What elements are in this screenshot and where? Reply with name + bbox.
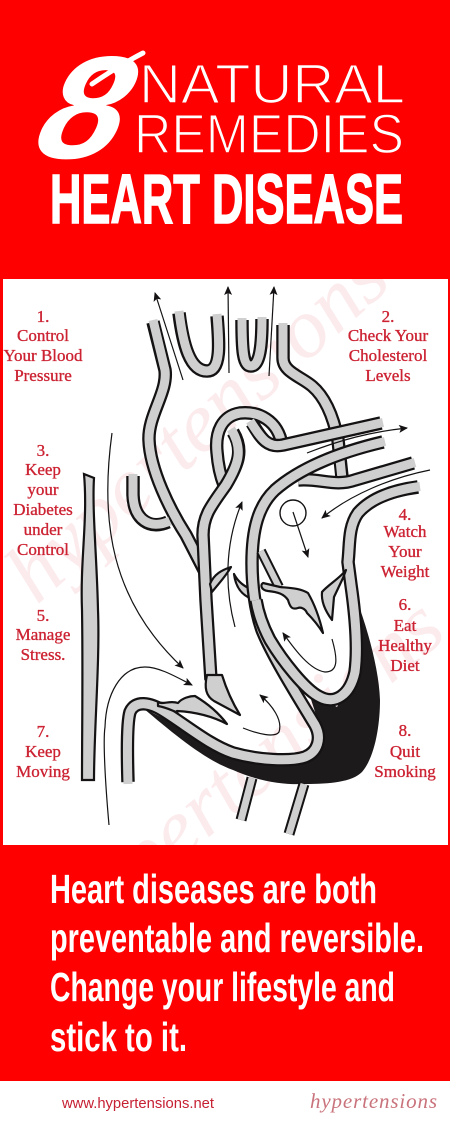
label 1: Your Blood bbox=[3, 346, 83, 365]
valve: mitral leaflet bbox=[261, 583, 323, 633]
vessel: aorta and right ventricle wall bbox=[127, 442, 385, 784]
label 2: Levels bbox=[365, 366, 411, 385]
valve: central bulb bbox=[206, 675, 240, 715]
vessel: left ventricle wall bbox=[256, 486, 420, 700]
label 8: 8. bbox=[399, 721, 411, 740]
arrow: right pulmonary bbox=[307, 428, 407, 453]
vessel: right upper branch bbox=[283, 323, 342, 479]
label 4: Weight bbox=[381, 562, 430, 581]
vessel: left U loop bbox=[133, 474, 170, 525]
label 6: Healthy bbox=[378, 636, 432, 655]
label 3: 3. bbox=[37, 441, 49, 460]
arrow: up right bbox=[269, 287, 274, 376]
label 7: 7. bbox=[37, 722, 49, 741]
labels bbox=[3, 307, 436, 781]
label 6: Eat bbox=[394, 616, 417, 635]
label 5: 5. bbox=[37, 606, 49, 625]
arrow: up center bbox=[228, 287, 229, 373]
label 3: under bbox=[24, 520, 63, 539]
arrow: central upward bbox=[228, 502, 242, 627]
label 6: Diet bbox=[390, 656, 420, 675]
heart muscle wall bbox=[143, 598, 380, 784]
label 6: 6. bbox=[399, 595, 411, 614]
panel: heart diagram background bbox=[3, 279, 448, 845]
label 3: your bbox=[27, 480, 59, 499]
panel: bottom red message bbox=[0, 845, 450, 1081]
circle valve icon bbox=[280, 500, 306, 526]
label 7: Moving bbox=[16, 762, 70, 781]
message text bbox=[50, 866, 424, 1060]
watermark bbox=[4, 279, 442, 845]
title line: natural: NATURAL bbox=[139, 52, 405, 115]
heart diagram bbox=[82, 287, 430, 834]
arrow: into left atrium bbox=[322, 470, 430, 518]
title bbox=[10, 27, 405, 238]
valve: tricuspid leaflet bbox=[158, 696, 227, 724]
label 8: Smoking bbox=[374, 762, 436, 781]
vessel: left upper branch bbox=[149, 320, 204, 570]
valve: small flap right bbox=[234, 574, 252, 599]
label 5: Manage bbox=[16, 625, 70, 644]
vessel: lower pulmonary vein bbox=[298, 462, 415, 483]
valve: mitral branch bbox=[261, 551, 279, 587]
label 3: Control bbox=[17, 540, 69, 559]
watermark: hypertensions bbox=[34, 579, 450, 959]
vessel: central descending bbox=[203, 429, 239, 680]
vessel: pulmonary trunk bbox=[250, 421, 383, 446]
arrows bbox=[104, 287, 430, 825]
label 1: Control bbox=[17, 326, 69, 345]
vessel: first U arch bbox=[179, 311, 219, 371]
label 3: Keep bbox=[25, 460, 61, 479]
vessel: second U arch bbox=[242, 317, 262, 366]
label 4: 4. bbox=[399, 505, 411, 524]
arrow: lower vena cava flow bbox=[104, 667, 192, 825]
label 2: Cholesterol bbox=[349, 346, 427, 365]
label 5: Stress. bbox=[21, 645, 65, 664]
label 2: 2. bbox=[382, 307, 394, 326]
label 7: Keep bbox=[25, 742, 61, 761]
label 2: Check Your bbox=[348, 326, 428, 345]
footer url: www.hypertensions.net bbox=[61, 1096, 214, 1112]
valve: small flap left bbox=[210, 567, 231, 592]
arrow: upper vena cava flow bbox=[108, 433, 183, 668]
vessel: left vena cava bbox=[82, 474, 98, 780]
arrow: through circle bbox=[293, 512, 308, 557]
label 1: 1. bbox=[37, 307, 49, 326]
vessel: lower coronary right bbox=[289, 784, 304, 834]
valve: right mitral leaflet bbox=[322, 570, 346, 620]
vessel: lower coronary left bbox=[241, 778, 252, 820]
title numeral 8: 8 bbox=[10, 27, 168, 190]
message text: stick to it. bbox=[50, 1014, 187, 1060]
label 8: Quit bbox=[390, 742, 420, 761]
arrow: up left bbox=[155, 293, 183, 380]
label 4: Your bbox=[388, 542, 422, 561]
arrow: right ventricle flow bbox=[243, 695, 280, 735]
label 1: Pressure bbox=[14, 366, 72, 385]
title line: remedies: REMEDIES bbox=[134, 102, 404, 165]
label 4: Watch bbox=[384, 522, 427, 541]
footer logo: hypertensions bbox=[310, 1089, 437, 1113]
arrow: left ventricle flow bbox=[283, 633, 336, 672]
vessel: pulmonary arch bbox=[217, 413, 282, 485]
label 3: Diabetes bbox=[13, 500, 73, 519]
